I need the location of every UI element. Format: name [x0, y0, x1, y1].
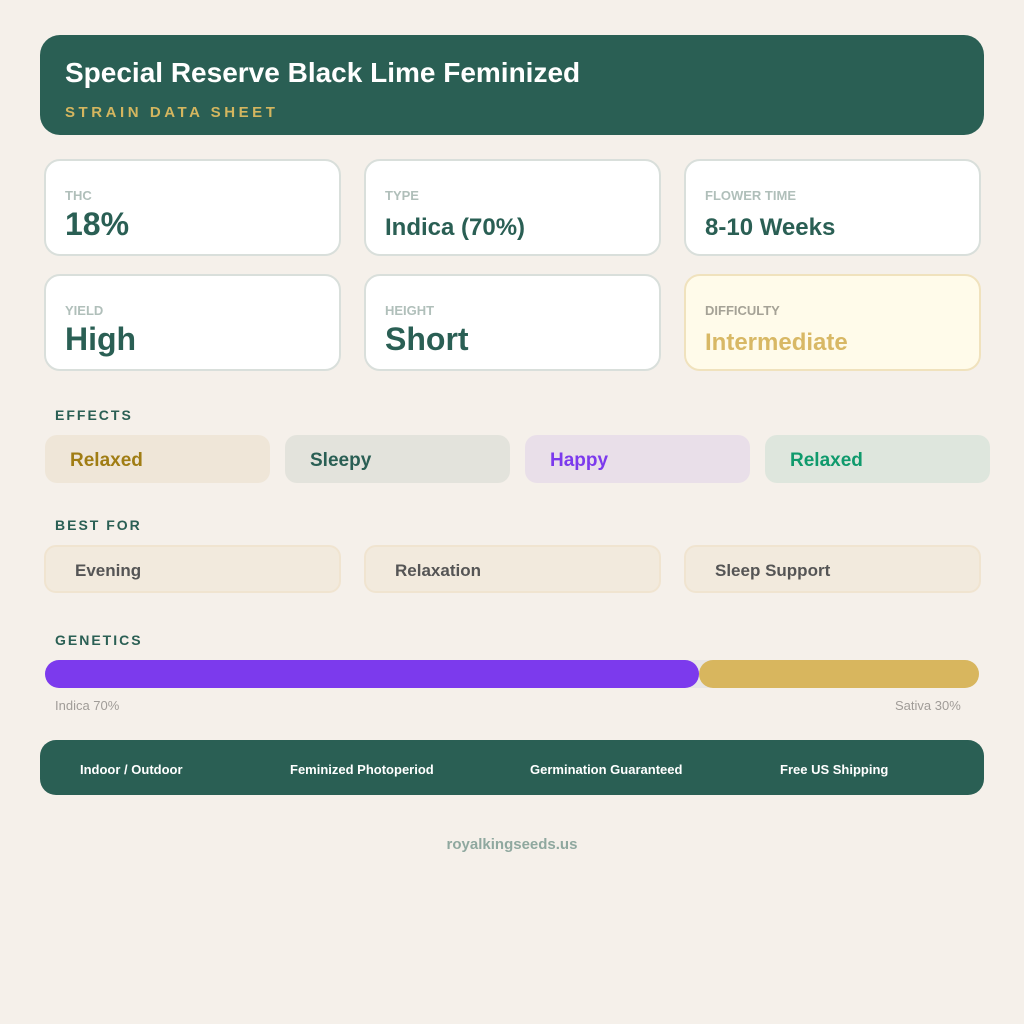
stat card: type [364, 159, 661, 256]
stat card: THC: 18% [65, 206, 129, 242]
stat card: difficulty: DIFFICULTY [705, 303, 780, 318]
stat card: type: TYPE [385, 188, 419, 203]
header banner [40, 35, 984, 135]
stat card: yield: YIELD [65, 303, 103, 318]
stat card: flower time: FLOWER TIME [705, 188, 796, 203]
sativa segment [699, 660, 979, 688]
feature: feminized photoperiod: Feminized Photoperiod [290, 762, 434, 777]
best-for chip: relaxation [364, 545, 661, 593]
best-for chip: evening: Evening [75, 561, 141, 580]
stat card: height: HEIGHT [385, 303, 434, 318]
subtitle: STRAIN DATA SHEET [65, 104, 278, 121]
best-for chip: sleep support: Sleep Support [715, 561, 830, 580]
genetics bar [45, 660, 979, 688]
stat card: yield [44, 274, 341, 371]
effect pill: relaxed gold [45, 435, 270, 483]
feature: free us shipping: Free US Shipping [780, 762, 888, 777]
heading: genetics: GENETICS [55, 632, 143, 648]
effect pill: relaxed green [765, 435, 990, 483]
stat card: THC: THC [65, 188, 92, 203]
stat card: yield: High [65, 321, 136, 357]
stat card: height: Short [385, 321, 469, 357]
stat card: THC [44, 159, 341, 256]
stat card: difficulty: Intermediate [705, 329, 848, 356]
best-for chip: sleep support [684, 545, 981, 593]
stat card: flower time: 8-10 Weeks [705, 214, 835, 241]
effect pill: sleepy [285, 435, 510, 483]
effect pill: relaxed gold: Relaxed [70, 450, 143, 471]
feature: indoor / outdoor: Indoor / Outdoor [80, 762, 183, 777]
effect pill: sleepy: Sleepy [310, 450, 371, 471]
effect pill: happy: Happy [550, 450, 608, 471]
heading: best for: BEST FOR [55, 517, 142, 533]
stat card: height [364, 274, 661, 371]
effect pill: relaxed green: Relaxed [790, 450, 863, 471]
effect pill: happy [525, 435, 750, 483]
feature: germination guaranteed: Germination Guaranteed [530, 762, 682, 777]
indica segment [45, 660, 699, 688]
label: sativa share: Sativa 30% [895, 698, 961, 713]
title: Special Reserve Black Lime Feminized [65, 57, 580, 88]
footer feature bar [40, 740, 984, 795]
heading: effects: EFFECTS [55, 407, 133, 423]
stat card: flower time [684, 159, 981, 256]
best-for chip: relaxation: Relaxation [395, 561, 481, 580]
stat card: type: Indica (70%) [385, 214, 525, 241]
label: indica share: Indica 70% [55, 698, 119, 713]
website url: royalkingseeds.us [447, 836, 577, 853]
best-for chip: evening [44, 545, 341, 593]
stat card: difficulty [684, 274, 981, 371]
